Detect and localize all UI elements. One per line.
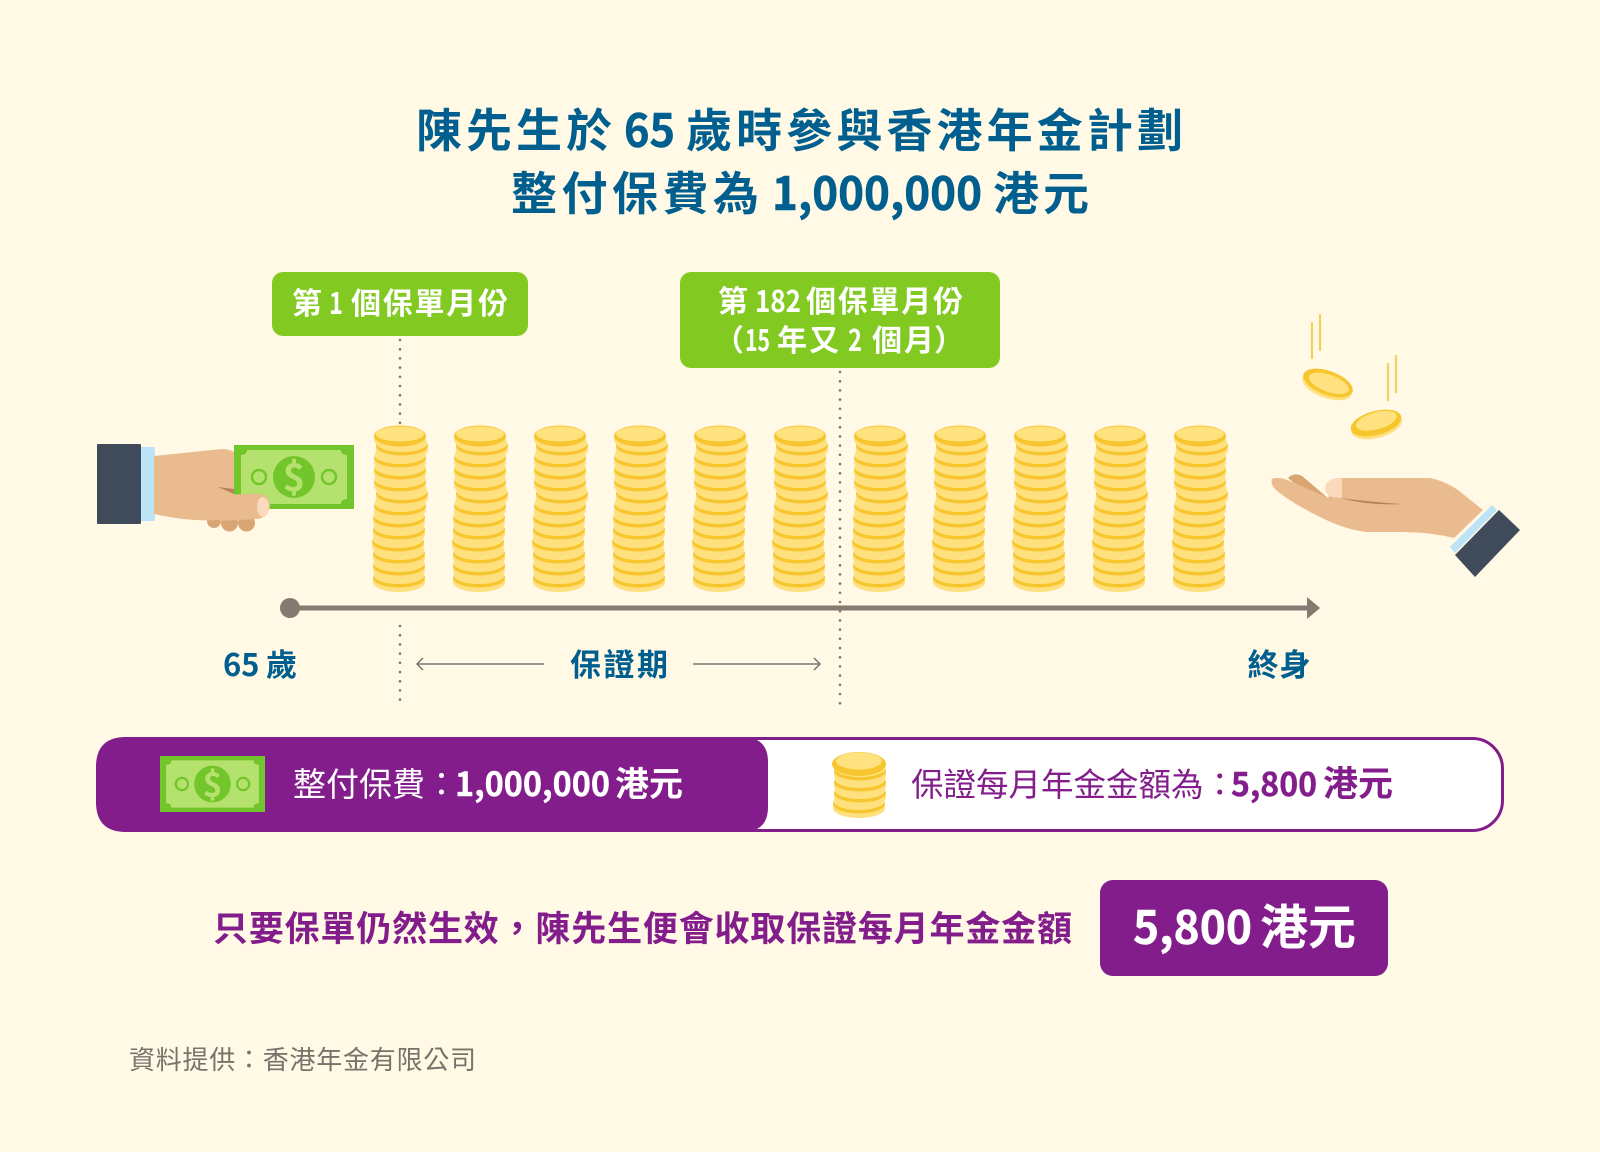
title [416,95,1183,224]
callout: month 1: 1 [329,279,343,323]
callout: month 1 [272,272,528,336]
callout: month 182: 182 [755,277,801,321]
icon: coins [832,752,886,818]
amount box: 5,800 [1133,892,1252,958]
icon: banknote [160,756,265,812]
premium text [293,757,683,806]
timeline arrow [280,597,1320,619]
amount box: 港元 [1260,888,1356,958]
premium text: 1,000,000 [455,758,610,806]
monthly annuity text [911,756,1393,807]
callout: month 182: 2 [848,316,862,360]
summary bar [96,737,1502,832]
icon: hand giving banknote [97,444,354,532]
label: lifetime: 終身 [1248,640,1310,685]
icon: banknote: $ [203,757,222,806]
amount box [1100,880,1388,976]
title: 陳先生於 [416,95,612,161]
title: 整付保費為 [511,158,759,224]
callout: month 182: （ [714,316,744,360]
callout: month 182: 第 [718,277,748,321]
statement: 只要保單仍然生效，陳先生便會收取保證每月年金金額 [213,901,1072,952]
callout: month 182: 個月 [872,316,934,360]
title: 65 [624,95,675,161]
callout: month 182: 年又 [777,316,839,360]
callout: month 182: ） [934,316,964,360]
dotted line: first month [399,340,401,704]
guarantee period: 保證期 [570,640,668,685]
title: 1,000,000 [772,158,982,224]
callout: month 182 [680,272,1000,368]
title: 港元 [993,158,1089,224]
callout: month 1: 個保單月份 [351,279,508,323]
icon: hand giving banknote: $ [283,447,305,502]
label: 65: 65 歲 [223,640,297,685]
falling coins [1298,314,1405,444]
source: 資料提供：香港年金有限公司 [129,1040,476,1077]
callout: month 1: 第 [292,279,322,323]
monthly annuity text: 港元 [1323,756,1393,807]
dotted line: month 182 [839,372,841,704]
icon: receiving hand [1272,474,1520,577]
monthly annuity text: 保證每月年金金額為： [911,759,1236,806]
monthly annuity text: 5,800 [1231,759,1317,806]
title: 歲時參與香港年金計劃 [686,95,1183,161]
premium text: 整付保費： [293,758,458,806]
callout: month 182: 個保單月份 [806,277,963,321]
premium text: 港元 [615,757,683,806]
callout: month 182: 15 [745,316,770,360]
guarantee period [417,640,820,685]
coin stacks [372,426,1228,592]
